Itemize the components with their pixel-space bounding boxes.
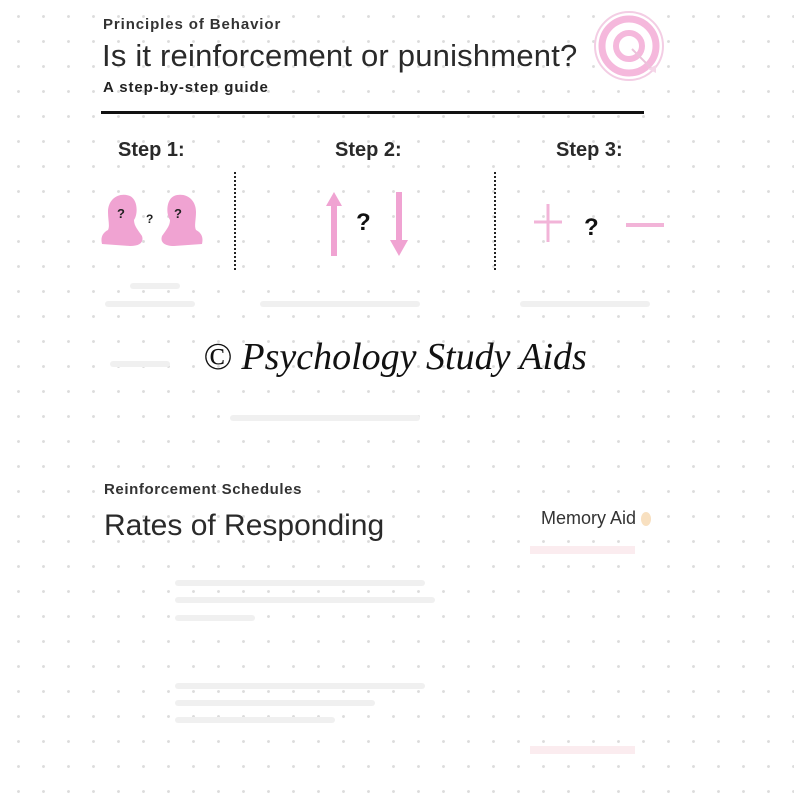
heading: step 2: Step 2: (335, 139, 402, 161)
heading: section label: Principles of Behavior (103, 16, 281, 33)
divider dotted 2 (494, 172, 496, 270)
icon: two heads with question marks: ? (117, 206, 125, 221)
icon: target (594, 11, 664, 81)
divider rule (101, 111, 644, 114)
heading: step 3: Step 3: (556, 139, 623, 161)
panel: memory aid box (530, 546, 635, 754)
icon: two heads with question marks: ? (146, 212, 153, 226)
icon: up/down arrows: ? (356, 209, 371, 236)
watermark signature: © Psychology Study Aids (203, 336, 587, 378)
icon: plus and minus: ? (584, 214, 599, 241)
callout: memory aid: Memory Aid (541, 508, 636, 528)
divider dotted 1 (234, 172, 236, 270)
faint schedule text (175, 580, 435, 723)
icon: two heads with question marks: ? (174, 206, 182, 221)
title: Is it reinforcement or punishment? (102, 38, 577, 73)
heading: section 2 label: Reinforcement Schedules (104, 481, 302, 498)
icon: two heads with question marks (102, 194, 202, 246)
subtitle: A step-by-step guide (103, 79, 269, 96)
icon: plus and minus (534, 204, 664, 242)
icon: up/down arrows (326, 192, 408, 256)
heading: step 1: Step 1: (118, 139, 185, 161)
faint step text (105, 283, 650, 421)
heading: section 2 title: Rates of Responding (104, 509, 384, 542)
